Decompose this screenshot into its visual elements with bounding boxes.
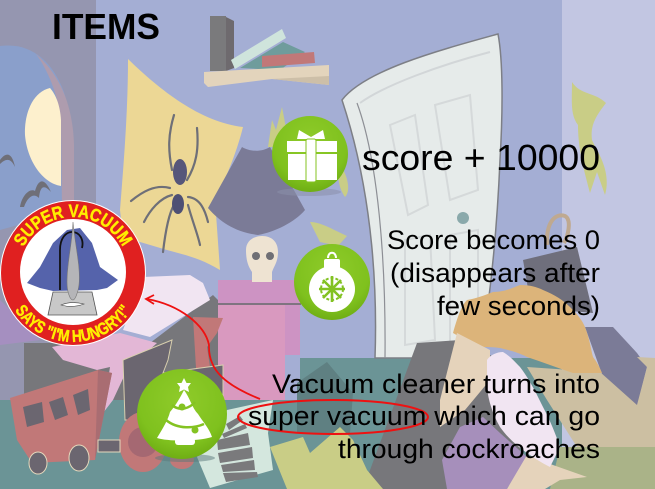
skull <box>246 236 278 282</box>
vacuum base and body <box>48 222 97 315</box>
icon: gift item <box>272 116 348 196</box>
green slime <box>268 82 607 246</box>
pink dresser <box>218 280 301 400</box>
icon: christmas tree item <box>137 369 227 462</box>
toy train wagon <box>10 370 120 474</box>
super vacuum badge <box>0 200 146 346</box>
text: ornament effect: Score becomes 0 <box>387 225 600 255</box>
spider poster <box>120 59 243 270</box>
text: tree effect: super vacuum which can go <box>248 401 600 431</box>
title: ITEMS <box>52 6 160 47</box>
white door <box>342 34 502 358</box>
text: ornament effect: (disappears after <box>390 258 600 288</box>
icon: ornament item <box>294 244 370 320</box>
text: gift effect: score + 10000 <box>362 137 600 178</box>
floor rug patches <box>270 427 383 489</box>
clothes pile <box>363 285 655 489</box>
toys: blanket and pink trumpet <box>52 275 223 413</box>
red ellipse highlight <box>238 400 428 434</box>
text: tree effect: Vacuum cleaner turns into <box>272 369 600 399</box>
lamp shade <box>208 147 305 235</box>
vacuum blue cover <box>27 228 118 291</box>
text: tree effect <box>248 369 600 464</box>
text: ornament effect: few seconds) <box>437 291 600 321</box>
text: ornament effect <box>387 225 600 321</box>
newspaper <box>197 400 273 488</box>
text: tree effect: through cockroaches <box>338 434 600 464</box>
shelf with books <box>204 16 329 87</box>
red arrow to badge <box>146 295 260 399</box>
badge slogan top: SUPER VACUUM <box>14 204 133 246</box>
toy locomotive <box>119 340 223 472</box>
umbrella on pile <box>523 215 593 313</box>
wall arch with moon <box>0 45 74 230</box>
badge slogan bottom: SAYS "I'M HUNGRY!" <box>16 304 127 342</box>
